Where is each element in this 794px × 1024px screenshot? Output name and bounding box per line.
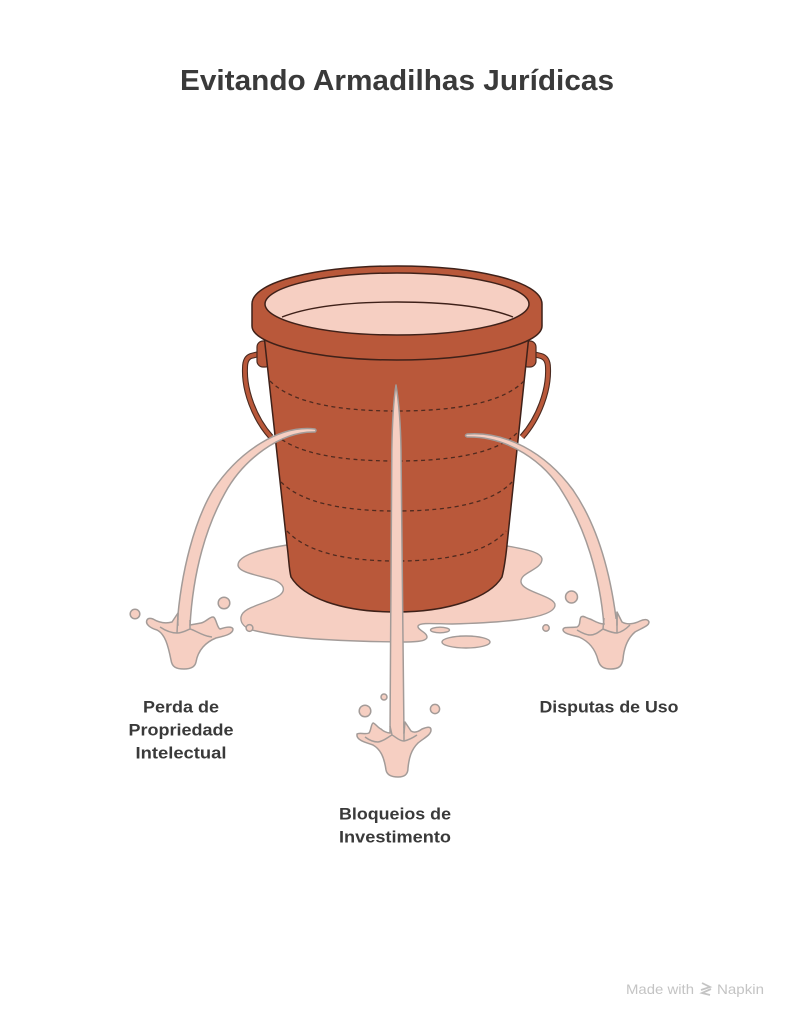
label: Bloqueios de Investimento: Bloqueios de xyxy=(339,804,451,824)
splash inner lines xyxy=(365,722,417,742)
centre leak xyxy=(357,385,440,777)
bucket opening xyxy=(265,273,529,335)
label: Perda de Propriedade Intelectual xyxy=(128,698,234,762)
label: Perda de Propriedade Intelectual: Propriedade xyxy=(128,720,234,740)
stream xyxy=(466,434,617,626)
label: Disputas de Uso: Disputas de Uso xyxy=(540,698,678,716)
label: Perda de Propriedade Intelectual: Perda de xyxy=(143,698,219,716)
icon: bucket xyxy=(245,266,548,612)
droplets xyxy=(359,694,440,717)
title: Evitando Armadilhas Jurídicas xyxy=(180,65,614,97)
right leak xyxy=(466,434,649,669)
water line xyxy=(282,302,513,317)
bucket body xyxy=(264,335,529,612)
splash xyxy=(357,722,431,777)
small puddle drops xyxy=(430,627,490,648)
splash junction fill xyxy=(391,728,403,736)
label: Bloqueios de Investimento: Investimento xyxy=(339,828,451,846)
bucket handle right xyxy=(522,354,548,437)
splash xyxy=(563,612,649,669)
splash inner lines xyxy=(577,612,630,635)
label: Perda de Propriedade Intelectual: Intelectual xyxy=(136,744,226,762)
droplets xyxy=(543,591,578,631)
splash junction fill xyxy=(179,620,189,629)
bucket rim xyxy=(252,266,542,360)
droplets xyxy=(130,597,253,631)
watermark: Made with Napkin xyxy=(626,981,764,997)
left leak xyxy=(130,429,316,669)
watermark: Made with Napkin: Napkin xyxy=(717,981,764,997)
puddle under bucket xyxy=(238,545,555,648)
stream xyxy=(177,429,316,626)
watermark: Made with Napkin: Made with xyxy=(626,981,694,997)
splash inner lines xyxy=(160,613,212,637)
icon: Napkin logo xyxy=(701,983,711,995)
stream xyxy=(390,385,404,735)
dashed bands xyxy=(270,381,524,561)
bucket handle left xyxy=(245,354,271,437)
splash junction fill xyxy=(605,619,616,629)
handle lugs xyxy=(257,341,536,367)
splash xyxy=(147,613,233,669)
label: Bloqueios de Investimento xyxy=(339,804,451,846)
